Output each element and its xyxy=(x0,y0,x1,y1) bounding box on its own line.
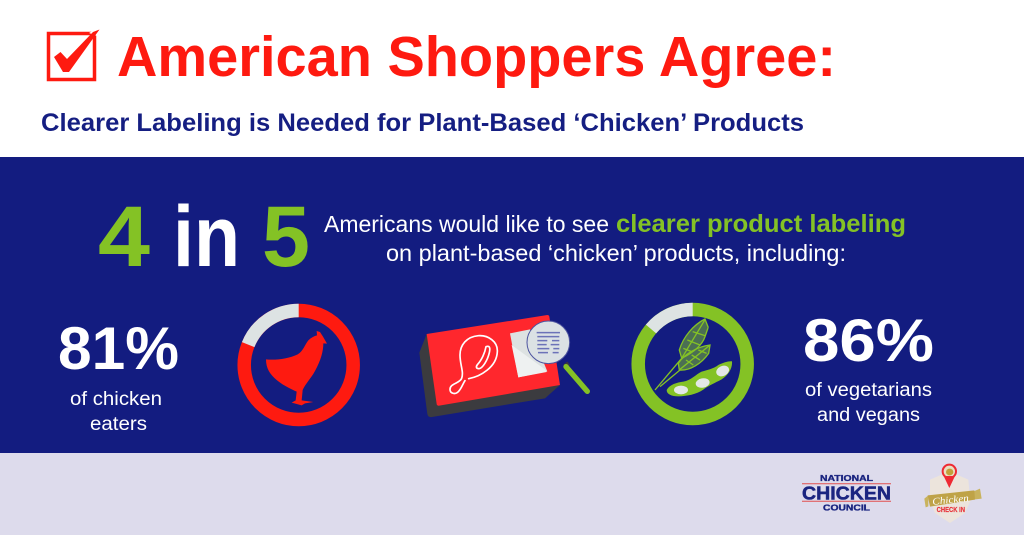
statistic: 86% of vegetarians and vegans xyxy=(803,307,934,426)
icon: wheat and soybean xyxy=(655,319,732,396)
statistic: 81% of chicken eaters xyxy=(58,315,179,435)
big statistic: 4 in 5 xyxy=(98,189,310,285)
magnifier handle xyxy=(563,362,570,368)
icon: package with magnifying glass xyxy=(419,315,587,417)
statistic: 86% of vegetarians and vegans: 86% xyxy=(803,307,934,374)
logo: National Chicken Council: COUNCIL xyxy=(823,502,870,512)
statement text: clearer product labeling xyxy=(616,210,906,238)
icon: drumstick outline xyxy=(450,336,497,393)
wheat stalks xyxy=(655,319,710,390)
donut chart: 86% with wheat and soybean icon xyxy=(638,310,747,418)
logo: Chicken Check In: CHECK IN xyxy=(937,507,965,514)
icon: red checkbox xyxy=(48,29,100,80)
statistic: 86% of vegetarians and vegans: and vegans xyxy=(817,405,920,426)
magnifier lens xyxy=(527,321,570,364)
statistic: 81% of chicken eaters: of chicken xyxy=(70,389,162,410)
logo: Chicken Check In xyxy=(924,465,982,523)
big statistic: 4 in 5: in xyxy=(173,189,240,285)
logo: National Chicken Council: CHICKEN xyxy=(802,482,891,504)
logo: National Chicken Council xyxy=(802,473,891,512)
nutrition label xyxy=(510,329,547,377)
statistic: 81% of chicken eaters: eaters xyxy=(90,414,147,435)
statistic: 81% of chicken eaters: 81% xyxy=(58,315,179,382)
logo: National Chicken Council: NATIONAL xyxy=(820,473,873,483)
big statistic: 4 in 5: 4 xyxy=(98,189,150,285)
statistic: 86% of vegetarians and vegans: of vegetarians xyxy=(805,380,932,401)
logo: Chicken Check In: Chicken xyxy=(932,493,969,508)
title: American Shoppers Agree: xyxy=(117,25,836,89)
statement text: on plant-based ‘chicken’ products, including: xyxy=(386,240,846,266)
panel: blue statistics band xyxy=(0,157,1024,453)
donut chart: 81% with chicken icon xyxy=(244,310,353,420)
icon: chicken xyxy=(266,331,327,405)
soybean pod xyxy=(667,361,732,396)
statement text: Americans would like to see xyxy=(324,211,609,237)
subtitle: Clearer Labeling is Needed for Plant-Based ‘Chicken’ Products xyxy=(41,109,804,137)
big statistic: 4 in 5: 5 xyxy=(262,189,310,285)
panel: lavender footer xyxy=(0,453,1024,535)
statement text xyxy=(324,210,906,266)
